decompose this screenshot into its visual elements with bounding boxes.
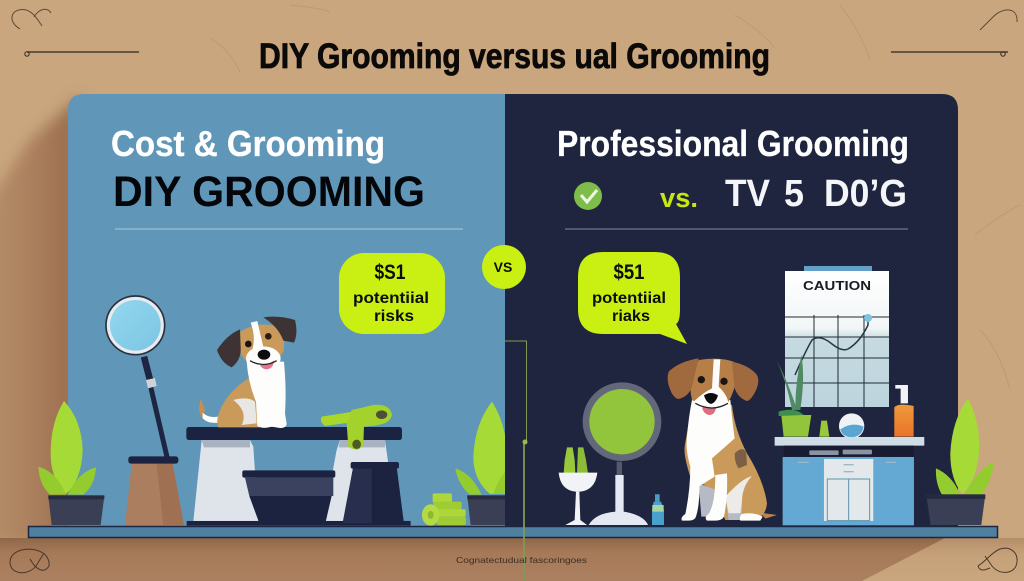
panel heading: DIY grooming: DIY GROOMING — [113, 168, 425, 216]
panel subheading — [725, 173, 907, 215]
callout: professional potential risks: riaks — [612, 308, 650, 325]
panel heading: cost and grooming: Cost & Grooming — [111, 123, 385, 164]
chart: caution board — [785, 266, 889, 407]
icon: green clippers — [321, 405, 392, 450]
icon: dark pedestal — [343, 462, 404, 523]
vs badge: VS — [494, 259, 512, 275]
icon: check mark — [574, 182, 602, 210]
callout: professional potential risks: $51 — [614, 261, 645, 284]
dog: DIY panel — [199, 317, 296, 428]
decorative rule: top left — [25, 52, 139, 56]
shelf — [28, 526, 998, 538]
callout: DIY potential risks: risks — [374, 308, 414, 325]
icon: counter with bottles — [775, 385, 924, 458]
icon: plant on counter — [777, 355, 811, 437]
panel subheading: 5 — [784, 173, 804, 215]
callout: professional potential risks — [578, 252, 687, 344]
callout: DIY potential risks — [339, 253, 445, 334]
panel: DIY grooming — [38, 94, 505, 526]
panel: professional grooming — [505, 94, 994, 526]
decorative flourish: bottom right — [978, 548, 1017, 572]
title: DIY Grooming versus ual Grooming — [259, 37, 770, 76]
chart trend line — [795, 319, 868, 375]
footer caption: Cognatectudual fascoringoes — [456, 555, 587, 565]
icon: potted plant left — [38, 401, 104, 525]
icon: small blue bottle — [652, 494, 664, 525]
decorative corner flourish: top right — [980, 10, 1017, 30]
panel subheading: TV — [725, 173, 771, 215]
dog body — [682, 400, 767, 521]
dog tail — [760, 513, 777, 519]
divider — [565, 228, 908, 230]
icon: bowl with green bottles — [559, 447, 597, 525]
chart title: CAUTION — [803, 278, 871, 293]
panel subheading: D0’G — [824, 173, 907, 215]
callout: DIY potential risks: potentiial — [353, 290, 429, 307]
callout: DIY potential risks: $S1 — [374, 261, 406, 284]
decorative flourish: bottom left — [10, 549, 49, 573]
connector line — [505, 341, 528, 581]
dog tail — [199, 398, 218, 423]
dog: professional panel — [668, 358, 777, 521]
dog head — [668, 358, 758, 415]
icon: potted plant right — [926, 398, 994, 525]
icon: dark bowl — [242, 470, 335, 525]
decorative rule: top right — [891, 52, 1008, 56]
dog head — [217, 317, 296, 370]
panel heading: professional grooming: Professional Grooming — [557, 123, 909, 164]
icon: blue cabinet — [783, 457, 914, 525]
callout: professional potential risks: potentiial — [592, 290, 666, 307]
icon: potted plant by divider — [455, 402, 505, 525]
vs badge — [482, 245, 526, 289]
decorative corner flourish: top left — [12, 9, 51, 29]
icon: rolled green towels — [422, 493, 466, 526]
icon: grooming table — [186, 427, 411, 526]
divider — [115, 228, 463, 230]
icon: magnifying mirror on stand — [106, 296, 184, 525]
label: vs.: vs. — [660, 183, 698, 213]
icon: round green mirror — [586, 386, 658, 525]
dog body — [217, 362, 287, 428]
